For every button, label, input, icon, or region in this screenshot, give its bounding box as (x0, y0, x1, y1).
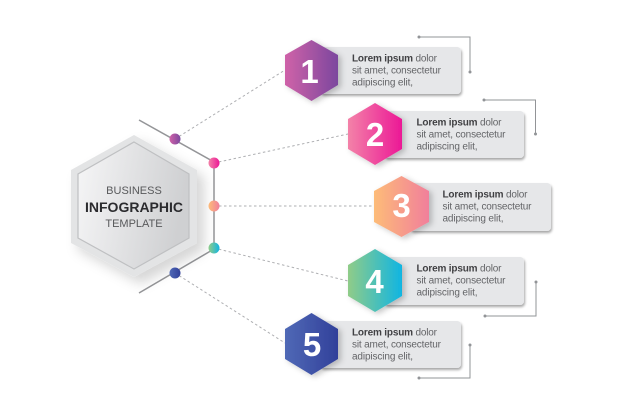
item 1: 1 (300, 53, 319, 90)
item 4: 4 (365, 263, 384, 300)
item 2: Lorem ipsum dolor (416, 118, 502, 128)
item 4: sit amet, consectetur (416, 276, 506, 286)
item 2: sit amet, consectetur (416, 130, 506, 140)
central title: TEMPLATE (105, 218, 163, 230)
item 4 (348, 249, 524, 312)
bracket 1 (418, 36, 472, 74)
item 3: Lorem ipsum dolor (442, 190, 528, 200)
item 3: adipiscing elit, (442, 214, 504, 224)
bracket 5 (418, 344, 472, 380)
item 3: 3 (392, 187, 411, 224)
item 1: adipiscing elit, (352, 78, 413, 88)
item 5: adipiscing elit, (352, 352, 413, 362)
connector lines (139, 70, 374, 343)
item 5: Lorem ipsum dolor (352, 328, 438, 338)
item 2: adipiscing elit, (416, 142, 478, 152)
item 4: Lorem ipsum dolor (416, 264, 502, 274)
central title (85, 185, 183, 230)
node dots (170, 134, 220, 278)
item 5 (285, 313, 461, 375)
item 3: sit amet, consectetur (442, 202, 532, 212)
item 3 (374, 176, 551, 237)
central title: BUSINESS (106, 185, 162, 197)
central hexagon (71, 135, 197, 277)
item 5: sit amet, consectetur (352, 340, 442, 350)
item 1: sit amet, consectetur (352, 66, 442, 76)
item 2 (348, 103, 524, 165)
central title: INFOGRAPHIC (85, 199, 183, 215)
item 1: Lorem ipsum dolor (352, 54, 438, 64)
bracket 2 (482, 98, 537, 136)
item 1 (285, 40, 461, 101)
item 2: 2 (366, 116, 384, 153)
bracket 4 (484, 280, 538, 318)
item 5: 5 (303, 326, 321, 363)
item 4: adipiscing elit, (416, 288, 478, 298)
